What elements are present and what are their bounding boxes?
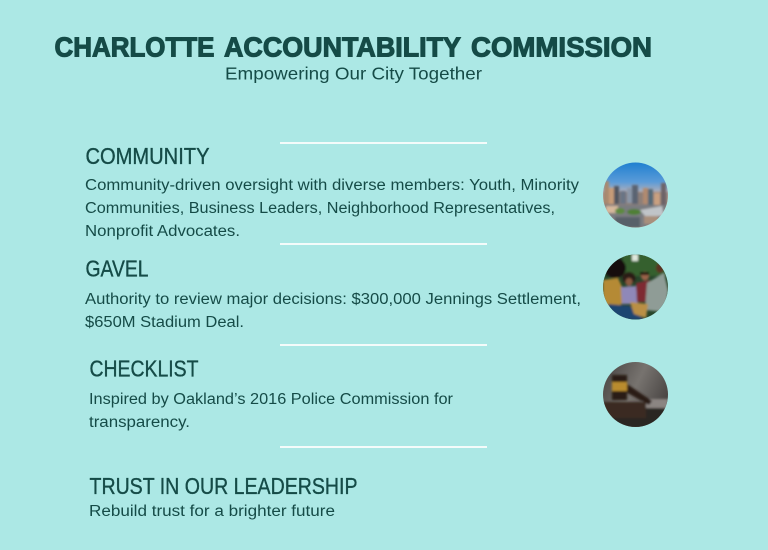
heading: trust: TRUST IN OUR LEADERSHIP	[90, 473, 358, 499]
text: community description: Community-driven oversight with diverse members: Youth, Minority	[85, 177, 579, 194]
heading: gavel: GAVEL	[86, 256, 149, 282]
section: checklist	[89, 356, 453, 431]
text: trust description: Rebuild trust for a brighter future	[89, 503, 335, 520]
title: ACCOUNTABILITY	[224, 32, 461, 62]
text: checklist description	[89, 391, 453, 431]
section: trust in our leadership	[89, 473, 358, 520]
section: community	[85, 143, 579, 240]
text: community description: Communities, Business Leaders, Neighborhood Representatives,	[85, 200, 555, 217]
title: CHARLOTTE	[54, 32, 214, 62]
subtitle: Empowering Our City Together	[225, 64, 482, 84]
title	[54, 32, 652, 62]
text: gavel description: Authority to review major decisions: $300,000 Jennings Settlement,	[85, 291, 581, 308]
text: checklist description: transparency.	[89, 414, 190, 431]
icon: city skyline photo	[603, 162, 668, 228]
icon: gavel photo	[603, 362, 668, 428]
heading: community: COMMUNITY	[86, 143, 210, 169]
text: community description	[85, 177, 579, 240]
text: community description: Nonprofit Advocates.	[85, 223, 240, 240]
text: gavel description: $650M Stadium Deal.	[85, 314, 244, 331]
title: COMMISSION	[471, 32, 652, 62]
text: gavel description	[85, 291, 581, 331]
section: gavel	[85, 256, 581, 331]
icon: people photo	[603, 254, 668, 320]
heading: checklist: CHECKLIST	[90, 356, 198, 382]
text: checklist description: Inspired by Oakland’s 2016 Police Commission for	[89, 391, 453, 408]
